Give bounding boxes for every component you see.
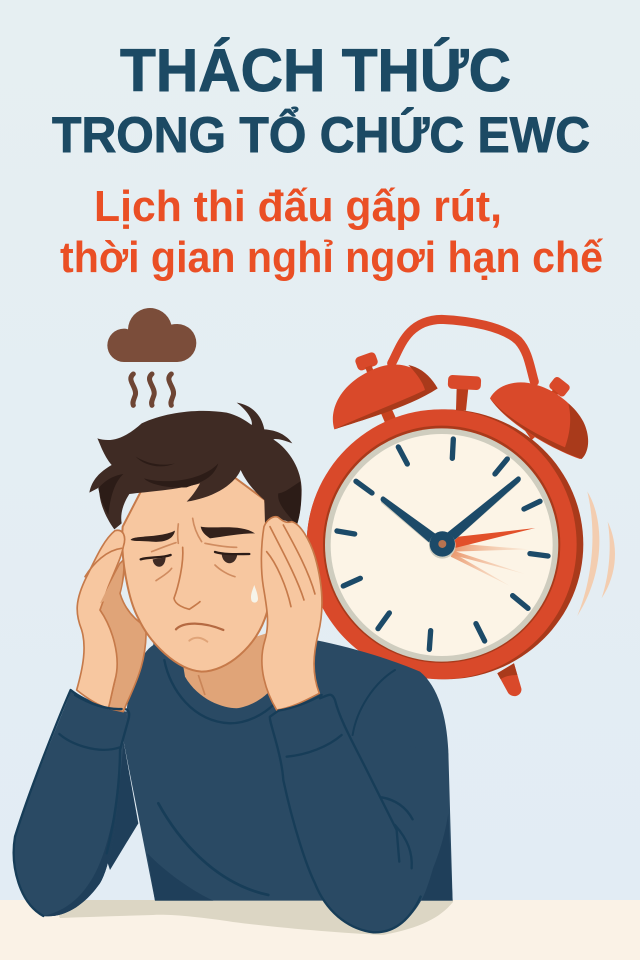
clock centre (429, 532, 456, 559)
left bell knob (354, 351, 380, 375)
hair shadow (98, 457, 301, 525)
torso shadow (147, 853, 213, 901)
sweater (14, 640, 453, 932)
hammer (456, 388, 468, 411)
clock hands (381, 499, 438, 543)
right hand (261, 517, 322, 710)
icon: rain cloud (107, 308, 196, 405)
facial wrinkles and nose (152, 518, 237, 642)
clock face (325, 428, 558, 662)
eyes (153, 554, 237, 567)
table (0, 900, 640, 960)
right arm (268, 693, 448, 932)
torso (123, 640, 453, 901)
hair (89, 403, 302, 529)
person (14, 403, 453, 932)
left bell (333, 364, 438, 429)
title (52, 37, 590, 163)
alarm clock (307, 319, 588, 696)
subtitle line 1: Lịch thi đấu gấp rút, (94, 182, 502, 231)
subtitle (60, 182, 603, 282)
right bell knob (545, 375, 571, 401)
clock handle (392, 319, 534, 382)
left hand back (100, 560, 146, 712)
right bell (490, 382, 588, 459)
bell stems (381, 409, 540, 440)
head (77, 403, 322, 712)
vibration arcs (577, 492, 615, 616)
left arm (14, 690, 127, 916)
title line 1: THÁCH THỨC (120, 37, 511, 104)
clock foot (497, 663, 521, 696)
eyebrows (131, 527, 255, 542)
title line 2: TRONG TỔ CHỨC EWC (52, 106, 590, 163)
hour ticks (337, 439, 548, 649)
clock case (307, 409, 583, 679)
neck (183, 633, 273, 708)
tear (251, 585, 258, 603)
table shadow (50, 900, 453, 935)
sweater cuff overlay (75, 693, 322, 711)
second hand motion blur (453, 543, 528, 552)
second hand (453, 528, 535, 548)
left hand front (77, 530, 125, 708)
sweater fold lines (14, 660, 421, 932)
subtitle line 2: thời gian nghỉ ngơi hạn chế (60, 233, 603, 282)
face (122, 467, 270, 672)
